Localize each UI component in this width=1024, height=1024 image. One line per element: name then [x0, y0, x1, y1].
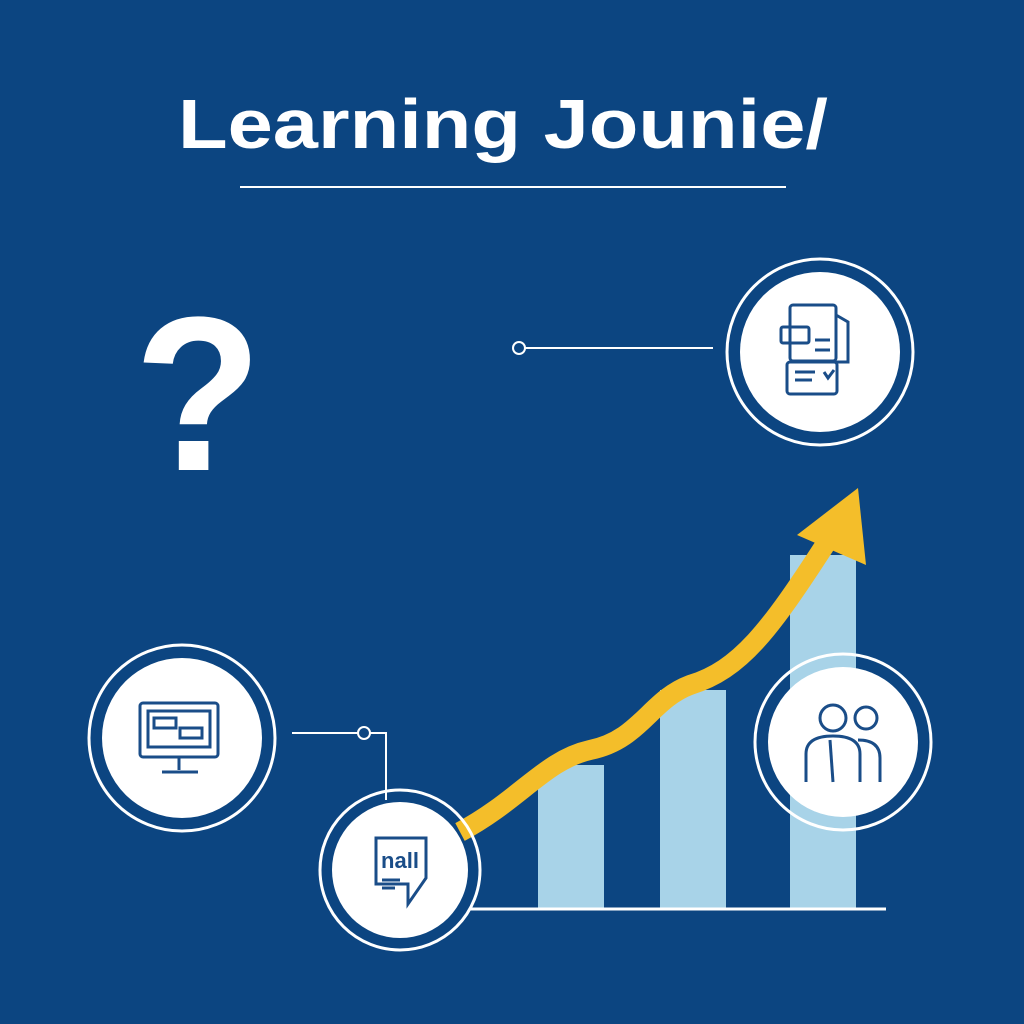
growth arrow: [460, 488, 866, 832]
icon: question mark: ?: [134, 271, 262, 517]
icon circle: people: [755, 654, 931, 830]
bar chart: [538, 555, 856, 908]
title: Learning Jounie/: [178, 85, 828, 163]
connector: left: [292, 727, 386, 800]
icon circle: computer: [89, 645, 275, 831]
icon circle: documents: [727, 259, 913, 445]
connector: top: [513, 342, 713, 354]
title underline: [240, 186, 786, 188]
icon circle: note: [320, 790, 480, 950]
chart baseline: [470, 908, 886, 910]
icon circle: note: nall: [381, 848, 419, 873]
